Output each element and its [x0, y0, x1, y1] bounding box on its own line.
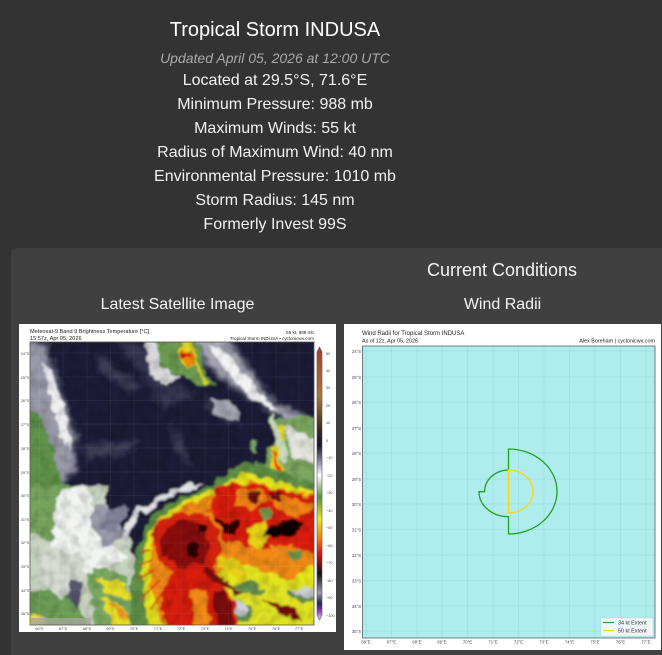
colour bar: −50 [326, 526, 332, 530]
wind radii figure title: As of 12z, Apr 05, 2026 [362, 338, 418, 344]
environmental pressure: Environmental Pressure: 1010 mb [154, 168, 396, 185]
right green region [261, 414, 314, 485]
latitude labels: 24°S [352, 349, 361, 354]
top green patch [150, 335, 212, 385]
latitude labels: 26°S [21, 399, 29, 403]
longitude labels: 76°E [616, 640, 625, 644]
grid lines [30, 342, 314, 625]
heading: latest satellite image: Latest Satellite Image [101, 296, 254, 313]
cloud mottling [30, 342, 314, 625]
former designation: Formerly Invest 99S [203, 216, 347, 233]
figure background [19, 324, 336, 632]
colour bar: −90 [326, 596, 332, 600]
longitude labels: 77°E [295, 627, 304, 631]
latitude labels: 24°S [21, 352, 29, 356]
longitude labels: 72°E [177, 627, 186, 631]
fan spikes [136, 548, 167, 621]
colour bar: −30 [326, 491, 332, 495]
satellite figure title: Meteosat-9 Band 9 Brightness Temperature [°C] [30, 329, 149, 335]
storm orange [150, 480, 325, 635]
lower left mixed cloud [30, 482, 138, 625]
50 kt extent [508, 470, 533, 513]
longitude labels: 70°E [463, 640, 472, 644]
longitude labels: 69°E [106, 627, 115, 631]
colour bar: 10 [326, 421, 330, 425]
location: Located at 29.5°S, 71.6°E [183, 72, 367, 89]
latitude labels: 28°S [352, 451, 361, 456]
latitude labels: 34°S [352, 604, 361, 609]
storm outer green [130, 462, 325, 635]
image credit box [31, 618, 91, 625]
colour bar: −80 [326, 579, 332, 583]
satellite figure title: 55 kt, 988 mb [286, 330, 314, 335]
longitude labels: 68°E [83, 627, 92, 631]
storm yellow [142, 472, 325, 635]
black cores [262, 515, 302, 540]
colour bar [317, 347, 335, 620]
grid lines [362, 346, 655, 638]
longitude labels [35, 627, 304, 631]
longitude labels: 74°E [565, 640, 574, 644]
longitude labels: 71°E [154, 627, 163, 631]
longitude labels: 76°E [272, 627, 281, 631]
colour bar: 50 [326, 352, 330, 356]
longitude labels: 73°E [201, 627, 210, 631]
figure background [344, 324, 661, 650]
colour bar: −70 [326, 561, 332, 565]
storm red upper right [210, 483, 325, 555]
longitude labels: 77°E [641, 640, 651, 644]
storm information block [154, 19, 396, 233]
latitude labels [352, 349, 361, 634]
panel: current conditions [11, 248, 662, 655]
wispy clouds [80, 352, 245, 470]
colour bar: −10 [326, 456, 332, 460]
satellite image figure [15, 324, 336, 640]
longitude labels [361, 640, 651, 644]
longitude labels: 72°E [514, 640, 523, 644]
plot border [362, 346, 655, 638]
longitude labels: 66°E [35, 627, 44, 631]
longitude labels: 75°E [590, 640, 600, 644]
satellite figure title [30, 329, 314, 342]
latitude labels: 25°S [21, 376, 29, 380]
latitude labels: 33°S [352, 578, 361, 584]
title: Tropical Storm INDUSA [170, 19, 380, 41]
left cloud band [30, 342, 82, 484]
latitude labels [21, 352, 29, 616]
satellite figure title: Tropical Storm INDUSA • cyclonicwx.com [230, 336, 314, 341]
34 kt extent [479, 449, 557, 534]
colour bar: −60 [326, 544, 332, 548]
radius of maximum wind: Radius of Maximum Wind: 40 nm [157, 144, 393, 161]
left green land [30, 408, 65, 487]
longitude labels: 67°E [59, 627, 68, 631]
longitude labels: 66°E [361, 640, 371, 644]
longitude labels: 73°E [539, 640, 549, 644]
right storm streak [272, 445, 284, 490]
wind radii figure title: Alex Boreham | cyclonicwx.com [579, 338, 656, 344]
latitude labels: 29°S [21, 471, 29, 475]
maximum winds: Maximum Winds: 55 kt [194, 120, 356, 137]
legend [601, 618, 653, 636]
longitude labels: 69°E [437, 640, 447, 644]
satellite image plot [30, 342, 314, 625]
satellite figure title: 15:57z, Apr 05, 2026 [30, 336, 82, 342]
longitude labels: 68°E [412, 640, 422, 644]
streaks lower left [30, 576, 134, 625]
lower red fan [158, 561, 239, 625]
colour bar: 40 [326, 369, 330, 373]
latitude labels: 32°S [21, 541, 29, 545]
legend: 34 kt Extent [618, 620, 647, 626]
longitude labels: 67°E [387, 640, 396, 644]
latitude labels: 35°S [21, 612, 29, 616]
longitude labels: 74°E [224, 627, 233, 631]
top convective blob [180, 335, 196, 370]
lower yellow and green bands [224, 586, 300, 619]
wind radii plot area [362, 346, 655, 638]
latitude labels: 28°S [21, 447, 29, 451]
legend: 50 kt Extent [618, 628, 647, 634]
colour bar: 30 [326, 386, 330, 390]
latitude labels: 30°S [21, 494, 29, 498]
updated timestamp: Updated April 05, 2026 at 12:00 UTC [160, 50, 390, 66]
colour bar: −20 [326, 474, 332, 478]
latitude labels: 32°S [352, 553, 361, 558]
latitude labels: 27°S [352, 426, 361, 431]
longitude labels: 70°E [130, 627, 139, 631]
latitude labels: 31°S [352, 528, 361, 532]
dark wedge [103, 484, 130, 532]
upper right cloud band [193, 342, 312, 421]
latitude labels: 27°S [21, 423, 29, 427]
colour bar: −40 [326, 509, 332, 513]
storm core red [153, 512, 222, 575]
colour bar: 20 [326, 404, 330, 408]
latitude labels: 26°S [352, 400, 361, 405]
colour bar: −100 [326, 614, 335, 618]
latitude labels: 35°S [352, 629, 361, 634]
latitude labels: 33°S [21, 565, 29, 569]
longitude labels: 71°E [488, 640, 498, 644]
plot border [30, 342, 314, 625]
wind radii figure [344, 324, 661, 650]
minimum pressure: Minimum Pressure: 988 mb [177, 96, 373, 113]
latitude labels: 34°S [21, 589, 29, 593]
latitude labels: 31°S [21, 518, 29, 522]
storm radius: Storm Radius: 145 nm [195, 192, 355, 209]
heading: wind radii: Wind Radii [464, 296, 541, 313]
longitude labels: 75°E [248, 627, 257, 631]
heading: current conditions: Current Conditions [427, 260, 577, 280]
latitude labels: 25°S [352, 375, 361, 380]
latitude labels: 29°S [352, 477, 361, 482]
wind radii figure title: Wind Radii for Tropical Storm INDUSA [362, 331, 464, 337]
latitude labels: 30°S [352, 502, 361, 507]
colour bar: 0 [326, 439, 328, 443]
wind radii figure title [362, 331, 656, 344]
